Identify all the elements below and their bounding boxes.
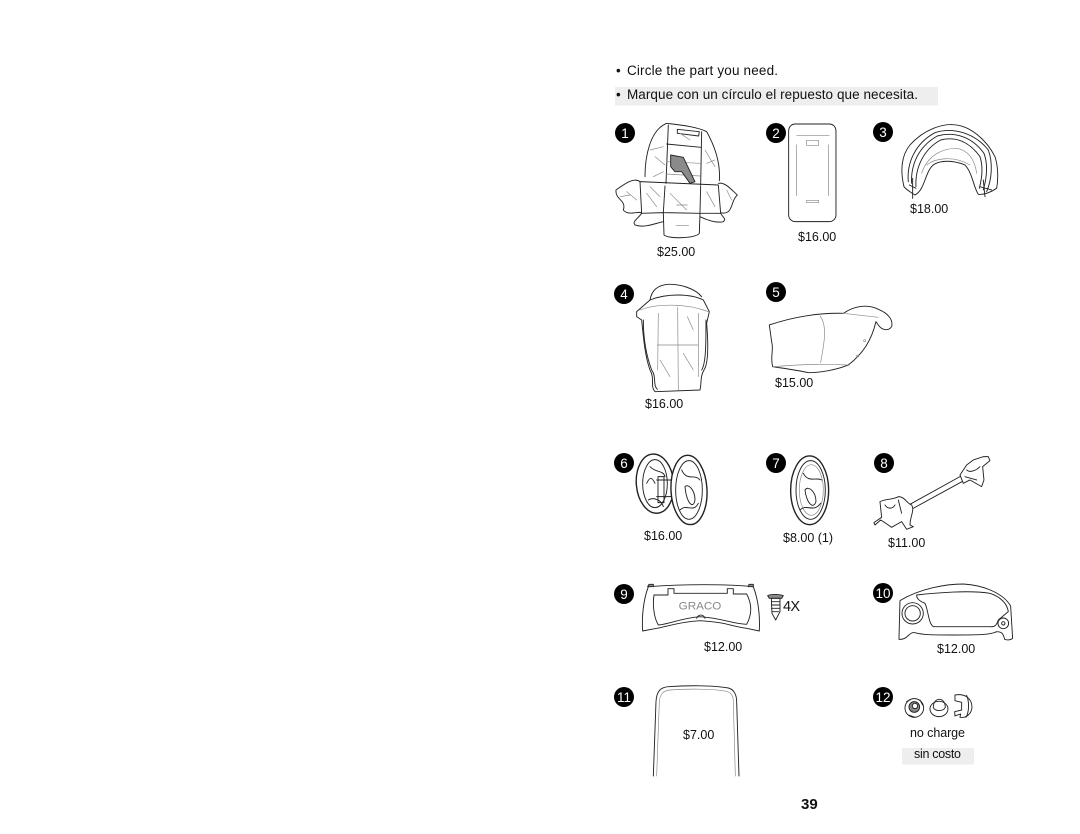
price 2: $16.00	[798, 230, 836, 244]
label: sin costo	[902, 747, 974, 764]
part 12: small fittings	[873, 687, 972, 717]
part 10: tray	[873, 583, 1013, 640]
page number: 39	[801, 796, 818, 813]
part 2: seat pad	[766, 123, 836, 222]
price 10: $12.00	[937, 642, 975, 656]
part 12: small fittings: 12	[875, 690, 891, 705]
part 11: handle bar: 11	[617, 690, 631, 705]
part 9: basket panel: GRACO	[679, 600, 722, 612]
part 3: canopy: 3	[879, 125, 887, 140]
icon: screw, quantity 4X	[768, 594, 800, 620]
instruction: English: •	[616, 63, 621, 78]
price 8: $11.00	[888, 536, 925, 550]
part 4: seat back	[614, 284, 709, 392]
label: sin costo: sin costo	[914, 747, 961, 761]
price 6: $16.00	[644, 529, 682, 543]
icon: screw, quantity 4X: 4X	[783, 599, 800, 615]
part 9: basket panel: 9	[620, 587, 628, 602]
part 6: wheel pair: 6	[620, 456, 628, 471]
price 1: $25.00	[657, 245, 695, 259]
part 3: canopy	[873, 122, 998, 198]
part 5: footrest cover	[766, 282, 892, 373]
price 3: $18.00	[910, 202, 948, 216]
price 9: $12.00	[704, 640, 742, 654]
instruction: Spanish: Marque con un círculo el repuesto que necesita.	[627, 87, 918, 102]
part 6: wheel pair	[614, 452, 709, 526]
part 9: basket panel	[614, 584, 759, 631]
part 7: single wheel: 7	[772, 456, 780, 471]
part 11: handle bar	[614, 686, 739, 776]
part 8: axle: 8	[880, 456, 888, 471]
part 2: seat pad: 2	[772, 126, 780, 141]
part 1: seat cover	[615, 123, 737, 238]
instruction: Spanish: •	[616, 87, 621, 102]
part 10: tray: 10	[875, 586, 891, 601]
part 7: single wheel	[766, 453, 829, 525]
price 5: $15.00	[775, 376, 813, 390]
price 11: $7.00	[683, 728, 714, 742]
part 8: axle	[874, 453, 990, 529]
label: no charge: no charge	[910, 726, 965, 740]
part 4: seat back: 4	[620, 287, 628, 302]
part 1: seat cover: 1	[621, 126, 629, 141]
price 4: $16.00	[645, 397, 683, 411]
part 5: footrest cover: 5	[772, 285, 780, 300]
instruction: English: Circle the part you need.	[627, 63, 778, 78]
price 7: $8.00 (1)	[783, 531, 833, 545]
